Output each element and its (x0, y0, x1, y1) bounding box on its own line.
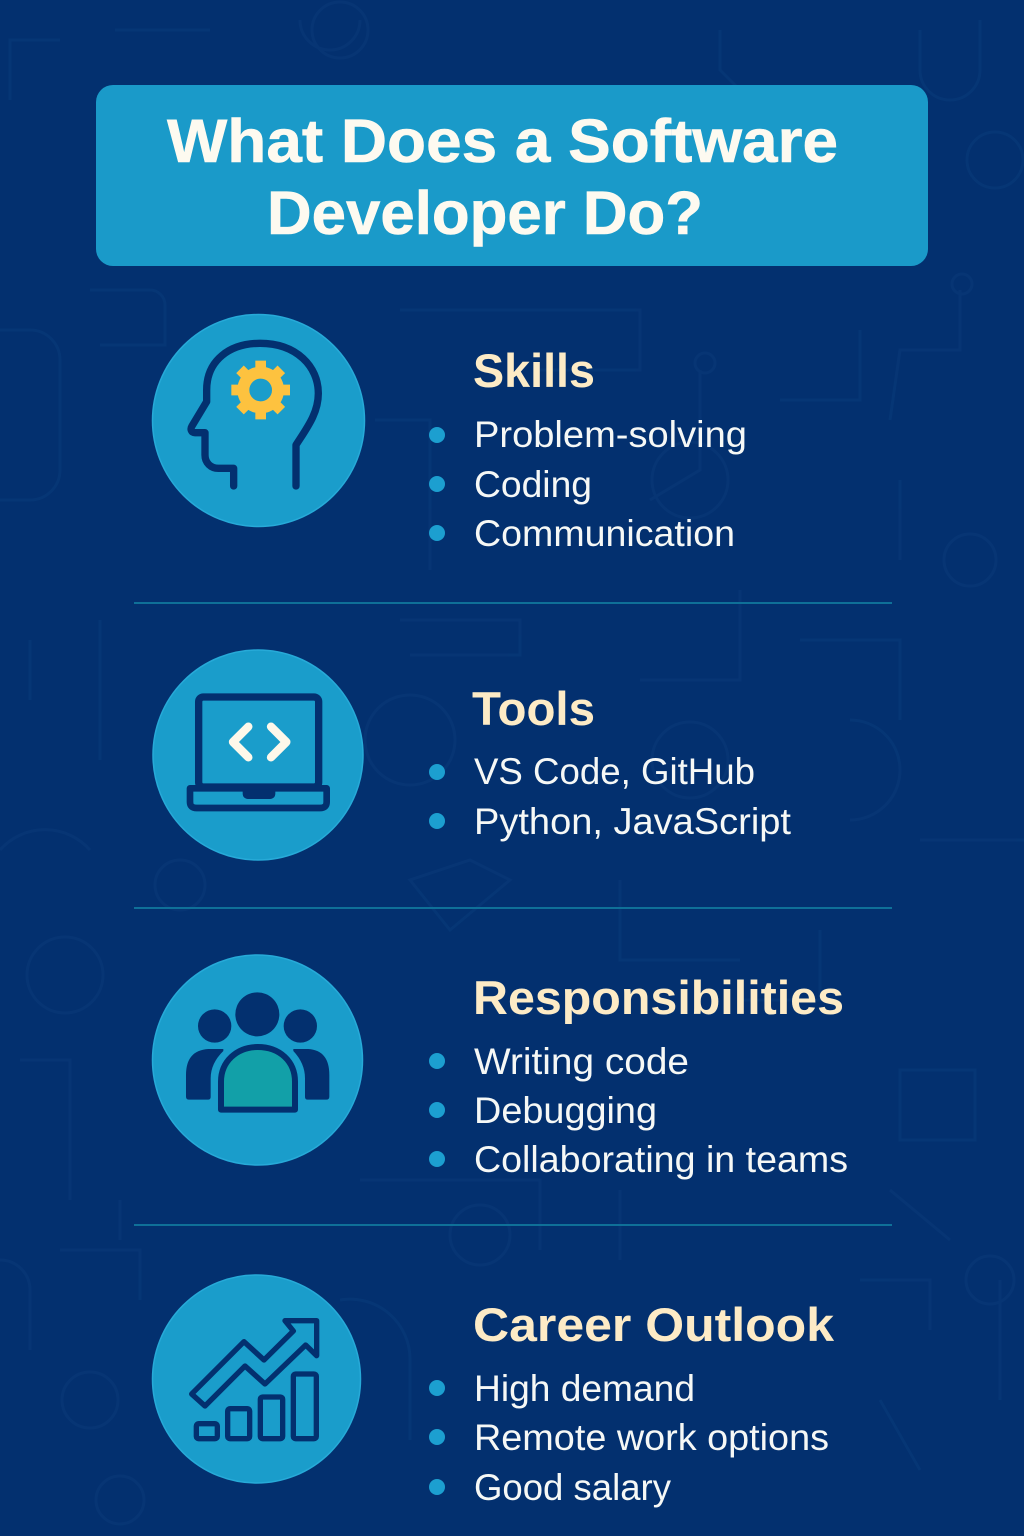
heading: responsibilities: Responsibilities (473, 971, 844, 1024)
list: responsibilities (429, 1041, 848, 1180)
list: responsibilities: Writing code (474, 1041, 689, 1082)
title banner: Developer Do? (267, 179, 703, 247)
title banner: What Does a Software (167, 107, 838, 175)
list: tools (429, 751, 792, 842)
title banner (96, 85, 928, 266)
list: skills: Communication (474, 513, 735, 554)
list: responsibilities: Collaborating in teams (474, 1139, 848, 1180)
list: skills: Coding (474, 464, 592, 505)
list: responsibilities: Debugging (474, 1090, 657, 1131)
list: tools: VS Code, GitHub (474, 751, 755, 792)
list: tools: Python, JavaScript (474, 801, 792, 842)
list: skills (429, 414, 747, 554)
panel: tools (153, 650, 792, 860)
list: skills: Problem-solving (474, 414, 747, 455)
panel: career outlook (152, 1275, 835, 1508)
icon: growth chart with arrow (152, 1275, 360, 1483)
panel: skills (152, 314, 747, 554)
icon: laptop with code brackets (153, 650, 363, 860)
list: career outlook: Good salary (474, 1467, 671, 1508)
heading: skills: Skills (473, 344, 595, 397)
heading: career outlook: Career Outlook (473, 1298, 835, 1351)
icon: team of people (152, 955, 362, 1165)
icon: head with gear (152, 314, 364, 526)
list: career outlook (429, 1368, 829, 1508)
panel: responsibilities (152, 955, 848, 1180)
list: career outlook: Remote work options (474, 1417, 829, 1458)
list: career outlook: High demand (474, 1368, 695, 1409)
heading: tools: Tools (472, 682, 595, 735)
